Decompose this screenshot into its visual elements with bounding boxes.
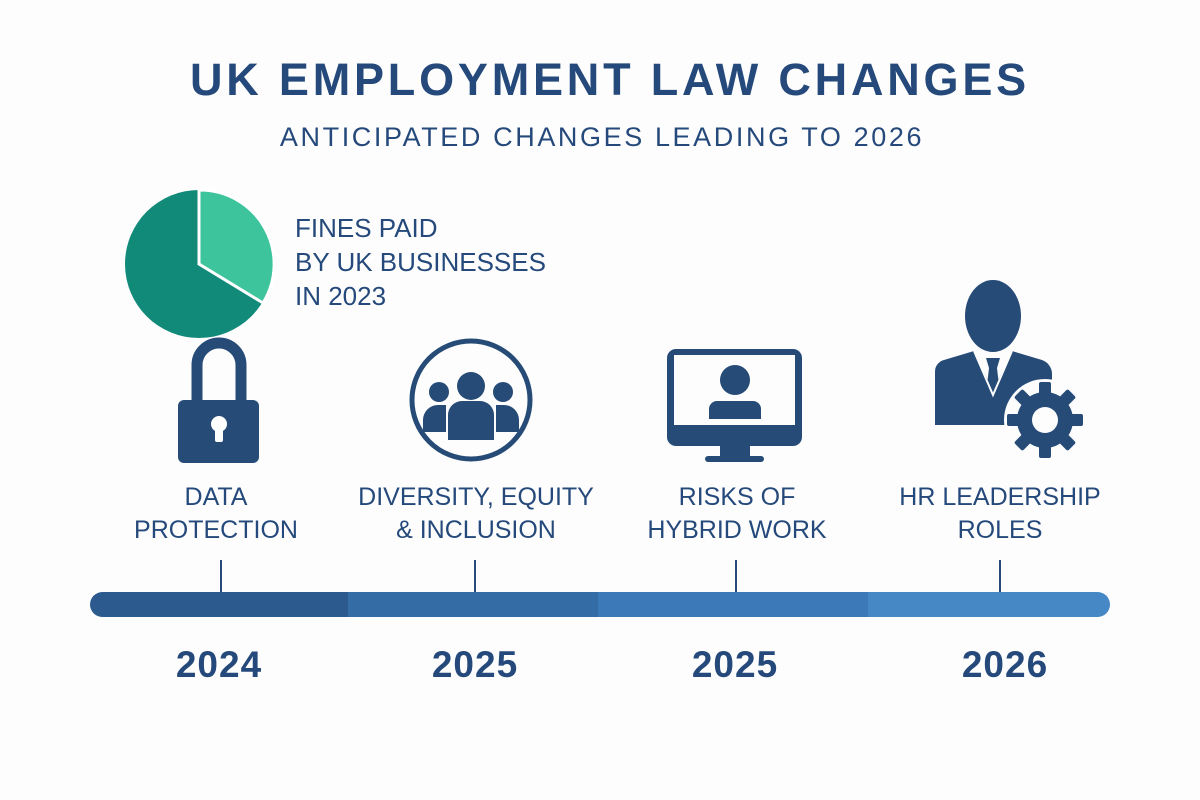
pie label: BY UK BUSINESSES	[295, 247, 546, 277]
pie chart	[125, 190, 274, 338]
label: hybrid work: HYBRID WORK	[647, 516, 827, 544]
label: HR leadership: HR LEADERSHIP	[899, 483, 1101, 511]
label: hybrid work: RISKS OF	[679, 483, 795, 511]
pie label: IN 2023	[295, 281, 386, 311]
label: DEI: DIVERSITY, EQUITY	[358, 483, 594, 511]
icon: people circle	[412, 341, 530, 459]
pie label: FINES PAID	[295, 213, 438, 243]
timeline bar	[90, 560, 1110, 617]
years: 2026	[962, 644, 1048, 685]
years: 2025	[692, 644, 778, 685]
label: data protection: PROTECTION	[134, 516, 298, 544]
label: DEI: & INCLUSION	[396, 516, 556, 544]
icon: monitor	[667, 349, 802, 462]
icon: lock	[178, 343, 259, 463]
subtitle: ANTICIPATED CHANGES LEADING TO 2026	[280, 122, 924, 152]
years: 2024	[176, 644, 262, 685]
title: UK EMPLOYMENT LAW CHANGES	[190, 54, 1030, 105]
icon: HR leader with gear	[935, 280, 1086, 461]
years	[176, 644, 1048, 685]
label: HR leadership: ROLES	[958, 516, 1042, 544]
years: 2025	[432, 644, 518, 685]
label: data protection: DATA	[185, 483, 248, 511]
